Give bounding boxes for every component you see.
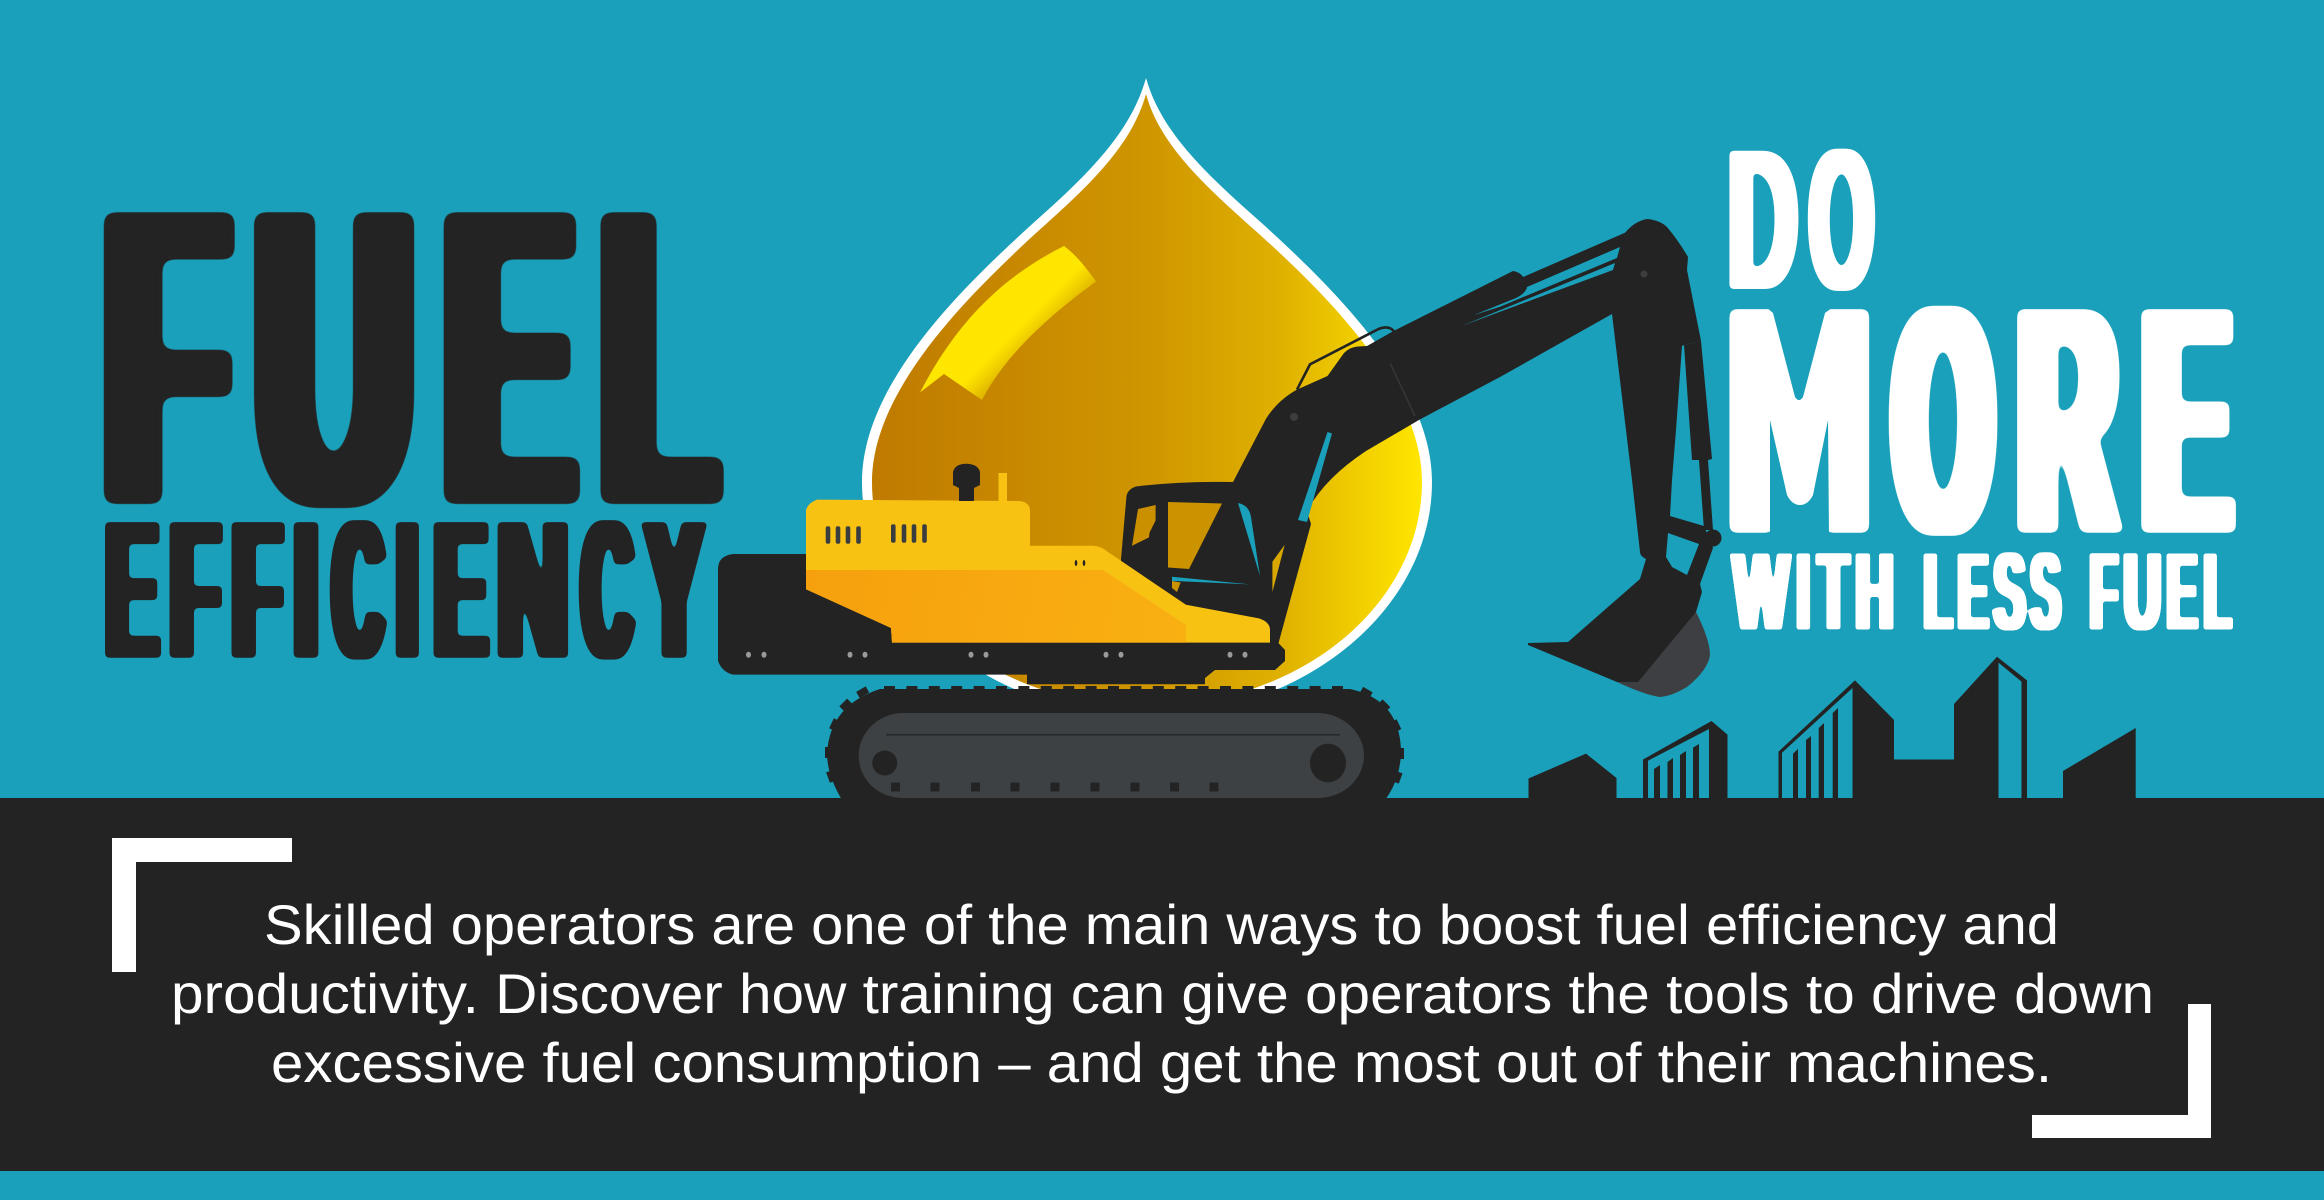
frame rivets xyxy=(746,652,1248,658)
heading line: WITH LESS FUEL: T xyxy=(1818,530,1849,653)
intro text: Skilled operators are one of the main ways to boost fuel efficiency and xyxy=(264,893,2059,956)
heading line: EFFICIENCY: E xyxy=(106,480,158,700)
excavator track xyxy=(825,686,1404,800)
heading line: MORE: O xyxy=(1895,239,1992,602)
bracket: bottom right xyxy=(2032,1004,2211,1138)
heading line: WITH LESS FUEL: S xyxy=(2030,530,2061,653)
heading line: DO: D xyxy=(1728,107,1798,332)
heading line: FUEL: F xyxy=(106,120,227,594)
heading line: FUEL: E xyxy=(446,120,572,594)
letter M inner counters xyxy=(1766,307,1833,535)
yellow pipe xyxy=(998,473,1007,501)
heading line: EFFICIENCY: F xyxy=(171,480,219,700)
body dots xyxy=(1075,560,1085,566)
heading line: WITH LESS FUEL: U xyxy=(2124,530,2161,653)
infographic canvas: L xyxy=(603,120,714,594)
heading: do more with less fuel: O xyxy=(1809,107,1874,332)
title: fuel efficiency xyxy=(106,120,714,700)
heading line: EFFICIENCY: F xyxy=(233,480,281,700)
excavator body xyxy=(806,464,1270,643)
heading line: WITH LESS FUEL: S xyxy=(1994,530,2025,653)
excavator boom gaps xyxy=(1298,247,1699,575)
panel: intro xyxy=(0,798,2324,1171)
heading line: WITH LESS FUEL: I xyxy=(1797,530,1810,653)
city skyline xyxy=(1528,657,2136,800)
excavator handrail xyxy=(1297,327,1394,390)
intro text: excessive fuel consumption – and get the most out of their machines. xyxy=(271,1031,2052,1094)
heading line: WITH LESS FUEL: E xyxy=(2167,530,2197,653)
heading line: WITH LESS FUEL: L xyxy=(1924,530,1952,653)
title: fuel efficiency: Y xyxy=(646,480,702,700)
infographic canvas: L xyxy=(2204,530,2231,653)
heading line: MORE: R xyxy=(2019,239,2116,602)
excavator boom and arm xyxy=(1121,219,1713,682)
exhaust cap xyxy=(953,464,980,501)
building: wedge xyxy=(2063,728,2136,800)
excavator xyxy=(718,219,1722,800)
heading line: FUEL: U xyxy=(256,120,412,594)
excavator undercarriage frame and counterweight xyxy=(718,554,1285,684)
building: slatted block xyxy=(1643,721,1728,800)
excavator arm cylinder xyxy=(1684,341,1722,546)
building: house xyxy=(1528,754,1616,800)
heading line: EFFICIENCY: E xyxy=(435,480,487,700)
intro text: productivity. Discover how training can give operators the tools to drive down xyxy=(171,962,2154,1025)
excavator boom details xyxy=(1290,270,1648,421)
heading line: EFFICIENCY: C xyxy=(333,480,383,700)
cab windows xyxy=(1132,502,1285,592)
heading line: MORE: M xyxy=(1729,239,1869,602)
heading line: WITH LESS FUEL: E xyxy=(1958,530,1988,653)
heading line: WITH LESS FUEL: W xyxy=(1733,530,1789,653)
heading: do more with less fuel xyxy=(1728,107,2231,653)
excavator bucket bowl xyxy=(1617,612,1710,697)
intro text xyxy=(171,893,2154,1094)
heading line: EFFICIENCY: C xyxy=(582,480,632,700)
icon: fuel drop xyxy=(862,78,1432,716)
building: tower group xyxy=(1778,657,2027,800)
heading line: WITH LESS FUEL: H xyxy=(1856,530,1894,653)
engine vents xyxy=(826,524,927,544)
bracket: top left xyxy=(112,838,292,972)
heading line: WITH LESS FUEL: F xyxy=(2090,530,2118,653)
heading line: EFFICIENCY: N xyxy=(498,480,568,700)
heading line: EFFICIENCY: I xyxy=(397,480,417,700)
heading line: EFFICIENCY: I xyxy=(295,480,317,700)
